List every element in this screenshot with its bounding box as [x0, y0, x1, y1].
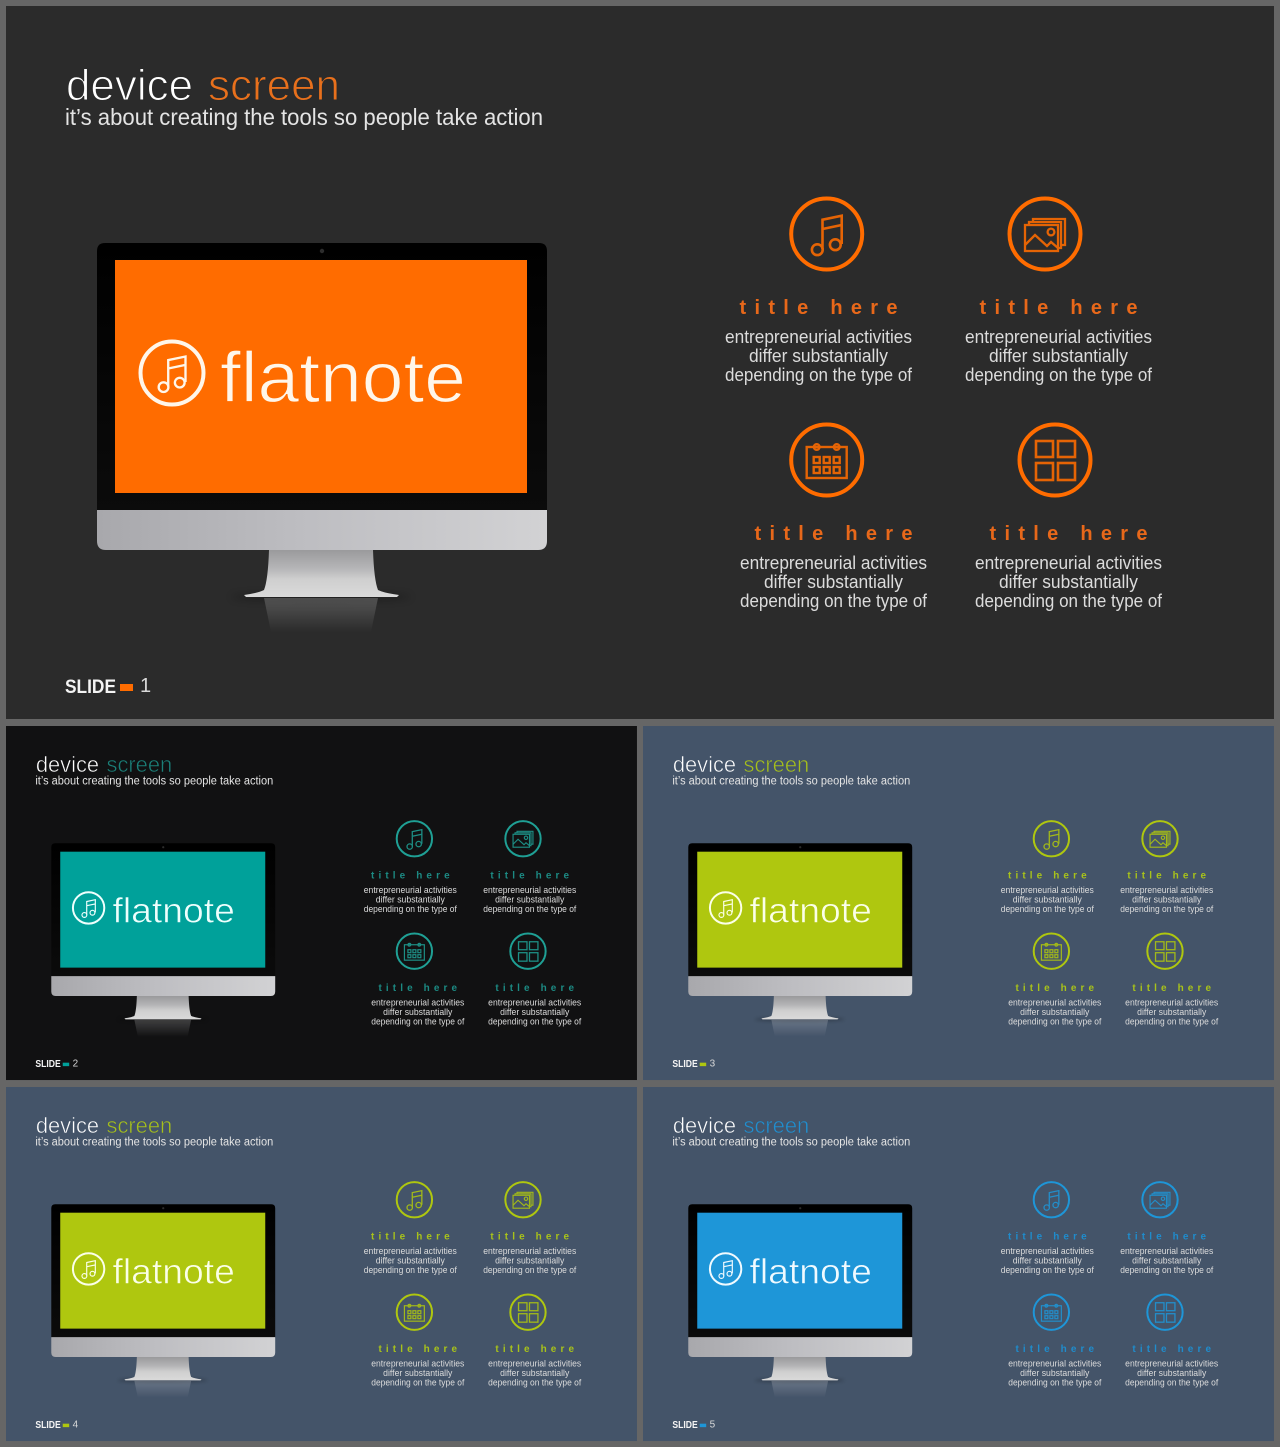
panel: slide 5 — [643, 1087, 1274, 1441]
feature: music: differ substantially — [376, 1255, 445, 1265]
slide label: 3 — [710, 1059, 716, 1070]
feature: images: title here — [1127, 1232, 1207, 1243]
feature: calendar: title here — [754, 523, 912, 545]
feature: calendar — [1008, 934, 1102, 1026]
subtitle: it’s about creating the tools so people take action — [35, 775, 273, 788]
monitor — [688, 1204, 912, 1398]
feature: calendar: differ substantially — [1020, 1368, 1090, 1378]
feature: images — [483, 1182, 577, 1275]
feature: grid: depending on the type of — [975, 590, 1163, 611]
feature: calendar: depending on the type of — [371, 1016, 465, 1026]
logo: flatnote: flatnote — [220, 339, 466, 418]
feature: images — [965, 198, 1153, 385]
feature: calendar: differ substantially — [383, 1368, 453, 1378]
title — [36, 1113, 172, 1138]
feature: music: title here — [740, 297, 898, 319]
feature: grid: entrepreneurial activities — [488, 1358, 582, 1368]
feature: music: differ substantially — [749, 345, 889, 366]
feature: music: depending on the type of — [1001, 904, 1094, 914]
feature: images: depending on the type of — [1120, 1265, 1214, 1275]
subtitle: it’s about creating the tools so people take action — [672, 1136, 910, 1149]
title: screen — [744, 752, 809, 777]
slide label: SLIDE — [672, 1059, 698, 1070]
feature: calendar: entrepreneurial activities — [371, 997, 465, 1007]
title: device — [673, 752, 736, 777]
feature: grid — [1125, 1295, 1219, 1387]
feature: calendar: title here — [1015, 983, 1095, 994]
feature: music — [725, 198, 913, 385]
feature: music: depending on the type of — [364, 904, 457, 914]
feature: grid: entrepreneurial activities — [975, 552, 1162, 573]
feature: images: entrepreneurial activities — [965, 326, 1152, 347]
feature: grid — [488, 934, 582, 1026]
feature: grid: entrepreneurial activities — [1125, 1358, 1219, 1368]
title: device — [673, 1113, 736, 1138]
feature: grid: title here — [990, 523, 1148, 545]
feature: music: entrepreneurial activities — [725, 326, 912, 347]
feature: images: entrepreneurial activities — [483, 1246, 577, 1256]
title: screen — [107, 752, 172, 777]
logo: flatnote: flatnote — [112, 1252, 235, 1291]
panel: slide 1 — [6, 6, 1274, 719]
feature: calendar — [1008, 1295, 1102, 1387]
feature: music: entrepreneurial activities — [1001, 1246, 1094, 1256]
slide label — [35, 1059, 79, 1070]
feature: calendar: entrepreneurial activities — [740, 552, 927, 573]
title — [673, 1113, 809, 1138]
feature: calendar: differ substantially — [383, 1007, 453, 1017]
feature: grid: differ substantially — [1137, 1007, 1207, 1017]
feature: calendar: depending on the type of — [1008, 1016, 1102, 1026]
feature: calendar: differ substantially — [764, 571, 904, 592]
feature: images: depending on the type of — [483, 904, 577, 914]
feature: grid: depending on the type of — [488, 1377, 582, 1387]
feature: images: depending on the type of — [483, 1265, 577, 1275]
feature: calendar: differ substantially — [1020, 1007, 1090, 1017]
title — [66, 61, 340, 110]
logo: flatnote: flatnote — [112, 891, 235, 930]
title: screen — [107, 1113, 172, 1138]
feature: grid: entrepreneurial activities — [1125, 997, 1219, 1007]
feature: grid — [1125, 934, 1219, 1026]
logo: flatnote: flatnote — [749, 1252, 872, 1291]
panel: slide 4 — [6, 1087, 637, 1441]
panel: slide 3 — [643, 726, 1274, 1080]
feature: music: differ substantially — [376, 894, 445, 904]
title: device — [66, 61, 193, 110]
feature: images: entrepreneurial activities — [1120, 1246, 1214, 1256]
feature: images: differ substantially — [495, 894, 565, 904]
feature: music: differ substantially — [1013, 1255, 1082, 1265]
feature: grid: differ substantially — [500, 1007, 570, 1017]
feature: music — [364, 1182, 457, 1275]
slide label: 5 — [710, 1420, 716, 1431]
logo: flatnote: flatnote — [749, 891, 872, 930]
feature: images: differ substantially — [1132, 894, 1202, 904]
subtitle: it’s about creating the tools so people take action — [65, 104, 543, 130]
feature: images: differ substantially — [1132, 1255, 1202, 1265]
feature: images: entrepreneurial activities — [1120, 885, 1214, 895]
title — [36, 752, 172, 777]
feature: music: entrepreneurial activities — [364, 885, 457, 895]
feature: calendar — [740, 424, 928, 611]
feature: grid: differ substantially — [500, 1368, 570, 1378]
feature: grid — [488, 1295, 582, 1387]
slide label — [35, 1420, 79, 1431]
feature: calendar: title here — [378, 1344, 458, 1355]
title: device — [36, 1113, 99, 1138]
feature: calendar — [371, 934, 465, 1026]
feature: music: title here — [371, 871, 450, 882]
feature: calendar: title here — [378, 983, 458, 994]
feature: images: title here — [490, 1232, 570, 1243]
feature: music — [1001, 1182, 1094, 1275]
subtitle: it’s about creating the tools so people take action — [672, 775, 910, 788]
feature: calendar: title here — [1015, 1344, 1095, 1355]
feature: calendar: depending on the type of — [740, 590, 928, 611]
feature: grid: depending on the type of — [1125, 1377, 1219, 1387]
feature: grid: differ substantially — [999, 571, 1139, 592]
monitor — [688, 843, 912, 1037]
feature: calendar: depending on the type of — [371, 1377, 465, 1387]
feature: music — [1001, 821, 1094, 914]
feature: calendar: entrepreneurial activities — [371, 1358, 465, 1368]
title — [673, 752, 809, 777]
feature: grid: differ substantially — [1137, 1368, 1207, 1378]
monitor — [51, 843, 275, 1037]
title: screen — [208, 61, 340, 110]
feature: images: depending on the type of — [965, 364, 1153, 385]
slide label: 2 — [73, 1059, 79, 1070]
feature: grid — [975, 424, 1163, 611]
feature: grid: depending on the type of — [488, 1016, 582, 1026]
title: screen — [744, 1113, 809, 1138]
slide label: SLIDE — [35, 1420, 61, 1431]
feature: music: entrepreneurial activities — [1001, 885, 1094, 895]
feature: images: entrepreneurial activities — [483, 885, 577, 895]
subtitle: it’s about creating the tools so people take action — [35, 1136, 273, 1149]
feature: images: differ substantially — [495, 1255, 565, 1265]
feature: music — [364, 821, 457, 914]
feature: grid: title here — [495, 983, 574, 994]
feature: images — [483, 821, 577, 914]
feature: music: title here — [1008, 871, 1087, 882]
feature: music: title here — [371, 1232, 450, 1243]
feature: images: title here — [980, 297, 1138, 319]
slide label: SLIDE — [35, 1059, 61, 1070]
feature: grid: depending on the type of — [1125, 1016, 1219, 1026]
feature: images: title here — [490, 871, 570, 882]
feature: images: differ substantially — [989, 345, 1129, 366]
feature: calendar: entrepreneurial activities — [1008, 1358, 1102, 1368]
slide label: SLIDE — [65, 676, 116, 698]
slide label — [672, 1420, 716, 1431]
monitor — [51, 1204, 275, 1398]
feature: images — [1120, 1182, 1214, 1275]
feature: images: title here — [1127, 871, 1207, 882]
slide label — [65, 675, 151, 698]
feature: music: entrepreneurial activities — [364, 1246, 457, 1256]
title: device — [36, 752, 99, 777]
feature: music: differ substantially — [1013, 894, 1082, 904]
feature: grid: title here — [495, 1344, 574, 1355]
feature: images — [1120, 821, 1214, 914]
feature: music: depending on the type of — [364, 1265, 457, 1275]
feature: grid: title here — [1132, 1344, 1211, 1355]
feature: calendar: entrepreneurial activities — [1008, 997, 1102, 1007]
slide label: 4 — [73, 1420, 79, 1431]
panel: slide 2 — [6, 726, 637, 1080]
slide label — [672, 1059, 716, 1070]
slide label: SLIDE — [672, 1420, 698, 1431]
feature: images: depending on the type of — [1120, 904, 1214, 914]
feature: grid: title here — [1132, 983, 1211, 994]
feature: music: depending on the type of — [725, 364, 913, 385]
feature: music: depending on the type of — [1001, 1265, 1094, 1275]
feature: calendar — [371, 1295, 465, 1387]
feature: grid: entrepreneurial activities — [488, 997, 582, 1007]
feature: calendar: depending on the type of — [1008, 1377, 1102, 1387]
monitor — [97, 243, 547, 632]
slide label: 1 — [140, 675, 151, 697]
feature: music: title here — [1008, 1232, 1087, 1243]
